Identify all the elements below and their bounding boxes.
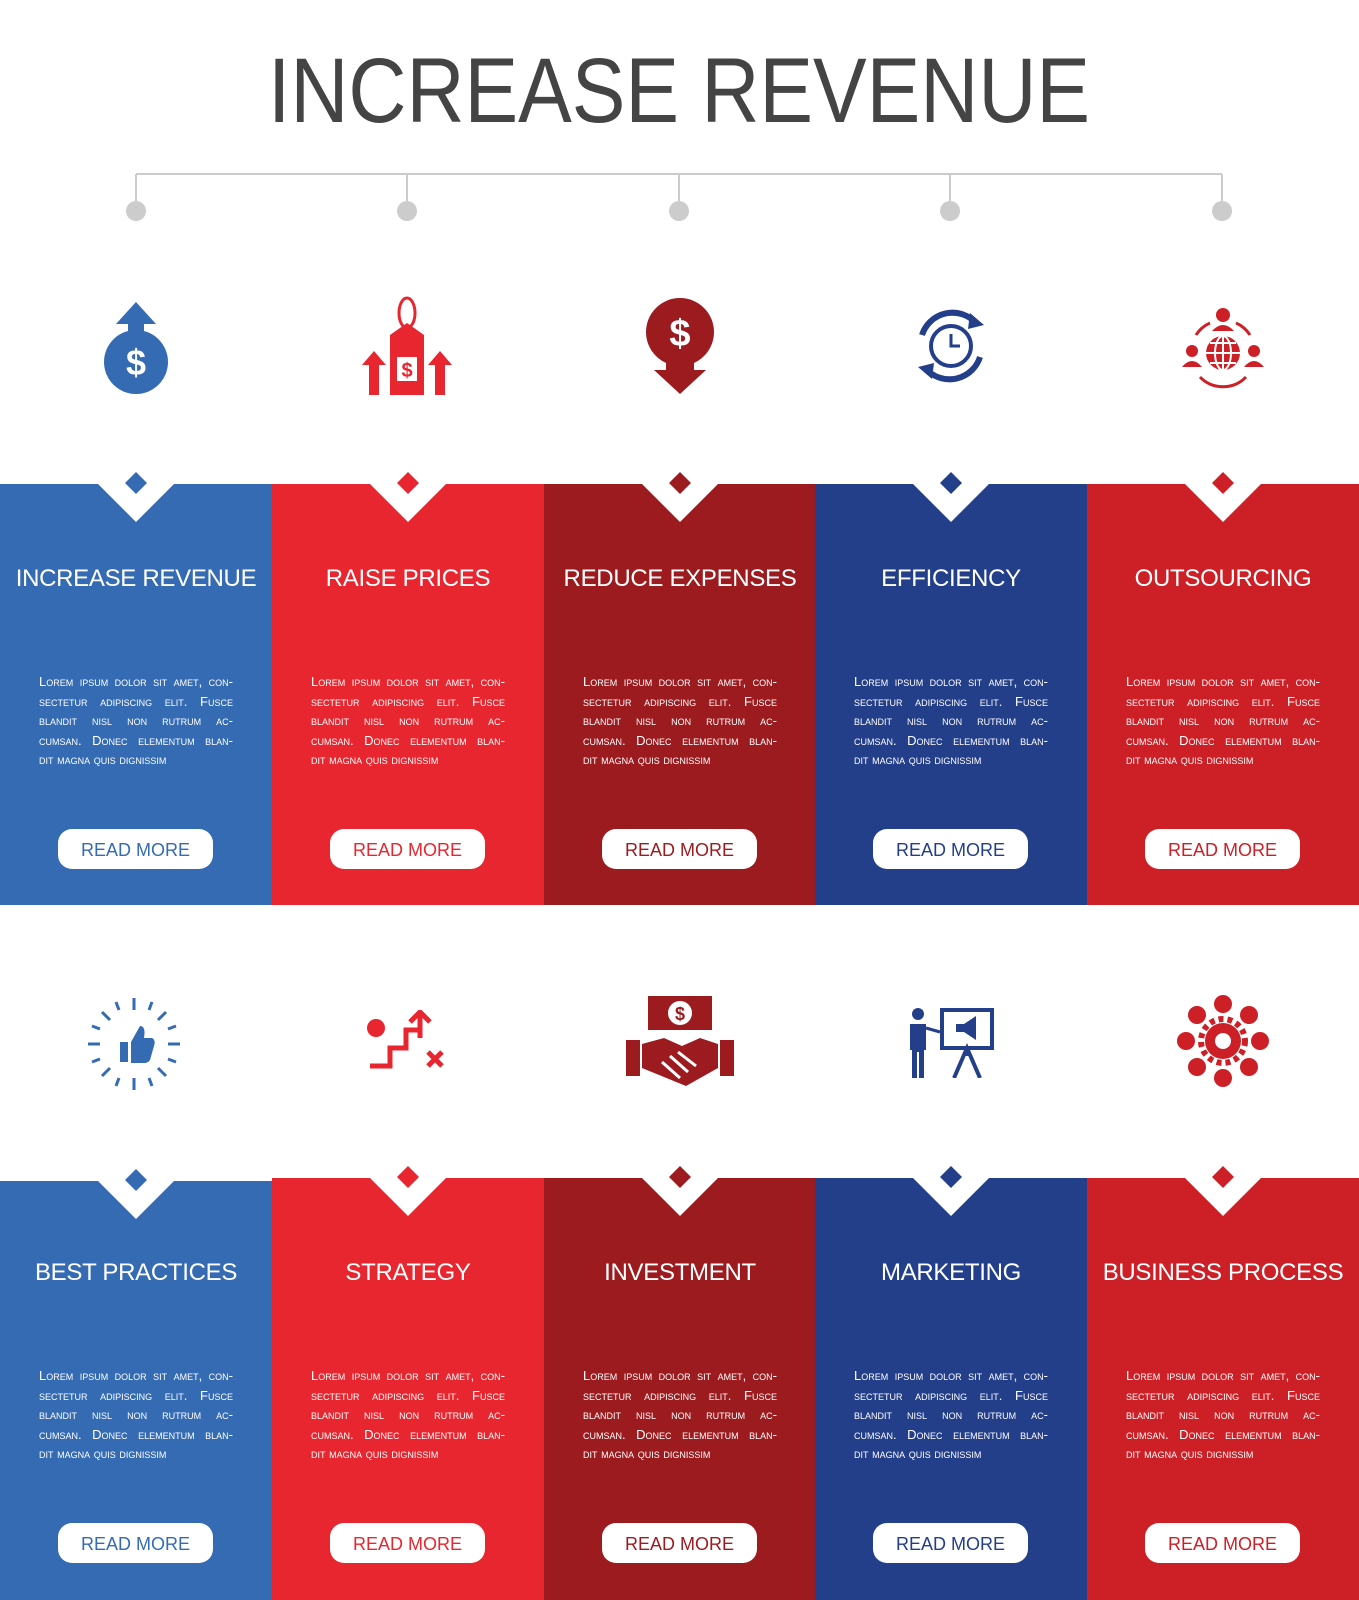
panel: business process: cumsan. Donec elementum blan- [1126, 1426, 1320, 1442]
panel: increase revenue: cumsan. Donec elementum blan- [39, 732, 233, 748]
icon: dollar pin down: $ [669, 313, 691, 355]
panel: outsourcing: sectetur adipiscing elit. Fusce [1126, 694, 1320, 708]
panel: outsourcing: OUTSOURCING [1135, 565, 1311, 592]
panel: raise prices: dit magna quis dignissim [311, 752, 438, 767]
panel: investment: INVESTMENT [604, 1259, 756, 1286]
panel: best practices: BEST PRACTICES [35, 1259, 237, 1286]
panel: business process: blandit nisl non rutrum ac- [1126, 1407, 1320, 1422]
panel: increase revenue: blandit nisl non rutrum ac- [39, 713, 233, 728]
icon: dollar pin down [646, 298, 714, 394]
panel: best practices: dit magna quis dignissim [39, 1446, 166, 1461]
panel: best practices: cumsan. Donec elementum blan- [39, 1426, 233, 1442]
panel: best practices: Lorem ipsum dolor sit amet, con- [39, 1368, 233, 1383]
panel: investment: sectetur adipiscing elit. Fusce [583, 1388, 777, 1402]
panel: reduce expenses: REDUCE EXPENSES [564, 565, 796, 592]
panel: outsourcing: dit magna quis dignissim [1126, 752, 1253, 767]
icon: strategy stairs [367, 1010, 444, 1068]
panel: increase revenue: INCREASE REVENUE [16, 565, 256, 592]
icon: price tag up: $ [401, 360, 413, 382]
panel: strategy: READ MORE [353, 1534, 462, 1554]
panel: investment: Lorem ipsum dolor sit amet, con- [583, 1368, 777, 1383]
icon: investment handshake [626, 996, 734, 1086]
panel: best practices: sectetur adipiscing elit. Fusce [39, 1388, 233, 1402]
panel: business process: sectetur adipiscing elit. Fusce [1126, 1388, 1320, 1402]
panel: raise prices: sectetur adipiscing elit. Fusce [311, 694, 505, 708]
panel: strategy: STRATEGY [345, 1259, 471, 1286]
panel: efficiency: cumsan. Donec elementum blan- [854, 732, 1048, 748]
panel: increase revenue: sectetur adipiscing elit. Fusce [39, 694, 233, 708]
panel: business process: READ MORE [1168, 1534, 1277, 1554]
icon: marketing presenter [910, 1008, 994, 1078]
panel: reduce expenses: Lorem ipsum dolor sit amet, con- [583, 674, 777, 689]
panel: marketing: cumsan. Donec elementum blan- [854, 1426, 1048, 1442]
panel: efficiency: READ MORE [896, 840, 1005, 860]
panel: reduce expenses: dit magna quis dignissim [583, 752, 710, 767]
panel: best practices: blandit nisl non rutrum ac- [39, 1407, 233, 1422]
panel: outsourcing [1087, 484, 1359, 905]
panel: best practices: READ MORE [81, 1534, 190, 1554]
panel: increase revenue: READ MORE [81, 840, 190, 860]
panel: business process [1087, 1178, 1359, 1600]
panel: efficiency: Lorem ipsum dolor sit amet, con- [854, 674, 1048, 689]
icon: thumbs up burst [88, 998, 180, 1090]
icon: price tag up [362, 296, 452, 395]
title: INCREASE REVENUE [268, 40, 1090, 140]
panel: efficiency: dit magna quis dignissim [854, 752, 981, 767]
panel: business process: BUSINESS PROCESS [1103, 1259, 1343, 1286]
panel: increase revenue [0, 484, 272, 905]
panel: investment: blandit nisl non rutrum ac- [583, 1407, 777, 1422]
panel: increase revenue: Lorem ipsum dolor sit amet, con- [39, 674, 233, 689]
panel: marketing: READ MORE [896, 1534, 1005, 1554]
panel: marketing [815, 1178, 1087, 1600]
panel: marketing: sectetur adipiscing elit. Fusce [854, 1388, 1048, 1402]
panel: investment: dit magna quis dignissim [583, 1446, 710, 1461]
icon: clock cycle [918, 310, 984, 382]
panel: efficiency: sectetur adipiscing elit. Fusce [854, 694, 1048, 708]
panel: outsourcing: cumsan. Donec elementum blan- [1126, 732, 1320, 748]
icon: money bag up: $ [126, 342, 146, 383]
panel: efficiency: blandit nisl non rutrum ac- [854, 713, 1048, 728]
panel: reduce expenses: blandit nisl non rutrum ac- [583, 713, 777, 728]
icon: business process gear [1177, 995, 1269, 1087]
panel: strategy: Lorem ipsum dolor sit amet, con- [311, 1368, 505, 1383]
panel: outsourcing: blandit nisl non rutrum ac- [1126, 713, 1320, 728]
panel: increase revenue: dit magna quis dignissim [39, 752, 166, 767]
panel: outsourcing: Lorem ipsum dolor sit amet, con- [1126, 674, 1320, 689]
panel: efficiency [815, 484, 1087, 905]
panel: efficiency: EFFICIENCY [881, 565, 1021, 592]
panel: outsourcing: READ MORE [1168, 840, 1277, 860]
panel: best practices [0, 1181, 272, 1600]
panel: marketing: dit magna quis dignissim [854, 1446, 981, 1461]
panel: investment: READ MORE [625, 1534, 734, 1554]
panel: reduce expenses [544, 484, 816, 905]
panel: marketing: MARKETING [881, 1259, 1021, 1286]
panel: raise prices: Lorem ipsum dolor sit amet, con- [311, 674, 505, 689]
panel: business process: dit magna quis dignissim [1126, 1446, 1253, 1461]
icon: money bag up [104, 302, 168, 394]
panel: marketing: Lorem ipsum dolor sit amet, con- [854, 1368, 1048, 1383]
panel: strategy [272, 1178, 544, 1600]
panel: business process: Lorem ipsum dolor sit amet, con- [1126, 1368, 1320, 1383]
panel: raise prices: RAISE PRICES [326, 565, 490, 592]
panel: raise prices: cumsan. Donec elementum blan- [311, 732, 505, 748]
panel: reduce expenses: sectetur adipiscing elit. Fusce [583, 694, 777, 708]
panel: reduce expenses: READ MORE [625, 840, 734, 860]
panel: strategy: blandit nisl non rutrum ac- [311, 1407, 505, 1422]
icon: investment handshake: $ [675, 1004, 685, 1024]
panel: investment: cumsan. Donec elementum blan- [583, 1426, 777, 1442]
panel: raise prices [272, 484, 544, 905]
panel: raise prices: blandit nisl non rutrum ac- [311, 713, 505, 728]
panel: investment [544, 1178, 816, 1600]
panel: raise prices: READ MORE [353, 840, 462, 860]
panel: reduce expenses: cumsan. Donec elementum blan- [583, 732, 777, 748]
panel: strategy: dit magna quis dignissim [311, 1446, 438, 1461]
connector tree [126, 173, 1232, 221]
panel: strategy: sectetur adipiscing elit. Fusce [311, 1388, 505, 1402]
panel: marketing: blandit nisl non rutrum ac- [854, 1407, 1048, 1422]
icon: outsourcing globe [1182, 308, 1264, 388]
panel: strategy: cumsan. Donec elementum blan- [311, 1426, 505, 1442]
